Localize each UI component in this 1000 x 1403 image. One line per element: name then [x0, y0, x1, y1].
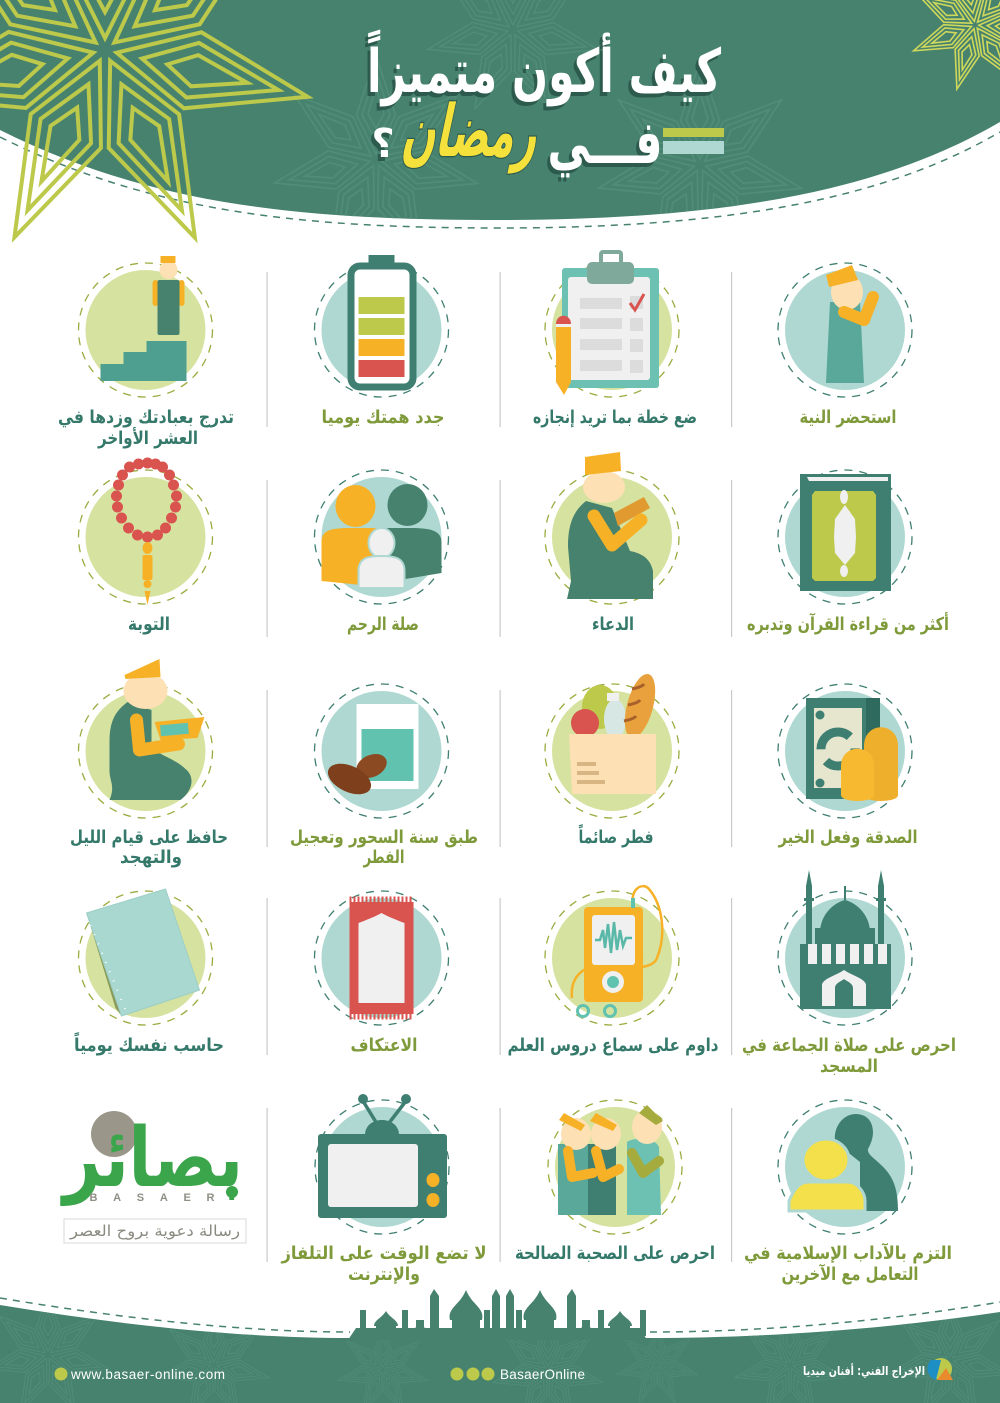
label: الاعتكاف [350, 1035, 418, 1056]
item: self accounting [74, 889, 224, 1056]
icon: reading man [78, 659, 212, 818]
item: family [314, 470, 448, 635]
label: طبق سنة السحور وتعجيل [290, 827, 478, 848]
item: retreat [314, 891, 448, 1056]
label: فطر صائماً [578, 824, 654, 848]
label: لا تضع الوقت على التلفاز [281, 1243, 486, 1264]
item: repentance [78, 458, 212, 635]
title [367, 29, 721, 178]
label: ضع خطة بما تريد إنجازه [533, 407, 697, 428]
label: تدرج بعبادتك وزدها في [58, 407, 234, 428]
item: intention [778, 263, 912, 428]
header panel [0, 0, 1000, 267]
icon: grocery bag [545, 671, 679, 818]
label: والإنترنت [348, 1264, 420, 1285]
icon: battery [314, 255, 448, 397]
item: battery [314, 255, 448, 428]
icon: audio player [545, 886, 679, 1025]
item: night prayer [70, 659, 228, 868]
logo word: بصائر [60, 1111, 243, 1206]
title: كيف أكون متميزاً [367, 29, 721, 107]
label: التعامل مع الآخرين [782, 1263, 918, 1285]
item: manners [744, 1100, 952, 1285]
label: داوم على سماع دروس العلم [508, 1035, 718, 1056]
item: mosque [742, 870, 956, 1077]
label [290, 827, 478, 868]
website: www.basaer-online.com [70, 1367, 225, 1382]
social handles [450, 1367, 585, 1382]
label: الدعاء [592, 614, 634, 635]
label: حافظ على قيام الليل [70, 827, 228, 848]
icon: family [314, 470, 448, 604]
label: صلة الرحم [347, 614, 419, 635]
title: فـــي [548, 108, 662, 178]
icon: money and coins [778, 684, 912, 818]
label: احرص على الصحبة الصالحة [515, 1243, 715, 1264]
mosque silhouette [348, 1289, 647, 1340]
social handles: BasaerOnline [500, 1367, 585, 1382]
label: جدد همتك يوميا [322, 407, 444, 428]
title word ramadan: رمضان [397, 90, 550, 174]
item: charity [778, 684, 918, 848]
label: العشر الأواخر [97, 427, 198, 449]
label: المسجد [820, 1056, 878, 1077]
label: التوبة [128, 614, 170, 635]
label: حاسب نفسك يومياً [74, 1032, 224, 1056]
lime star right [897, 0, 1000, 101]
logo tagline: رسالة دعوية بروح العصر [69, 1222, 240, 1240]
icon: water and dates [314, 684, 448, 818]
icon: clipboard [545, 252, 679, 397]
title: ؟ [371, 121, 395, 167]
icon: television [315, 1094, 449, 1234]
logo tagline [64, 1219, 246, 1243]
item: iftar [545, 671, 679, 848]
item: suhoor [290, 684, 478, 868]
icon: man on stairs [78, 256, 212, 397]
faint footer stars [0, 1312, 1000, 1403]
item: supplication [545, 452, 679, 635]
label [744, 1242, 952, 1285]
label [58, 407, 234, 449]
icon: notebook [78, 889, 212, 1025]
label: التزم بالآداب الإسلامية في [744, 1242, 952, 1264]
item: quran [747, 470, 949, 635]
label: الصدقة وفعل الخير [778, 827, 918, 848]
icon: quran book [778, 470, 912, 604]
dividers [266, 272, 732, 1262]
icon: three friends [548, 1100, 682, 1234]
icon: prayer rug [314, 891, 448, 1025]
item: television [281, 1094, 486, 1285]
label: احرص على صلاة الجماعة في [742, 1035, 956, 1056]
item: company [515, 1100, 715, 1264]
label: والتهجد [120, 847, 182, 868]
label [70, 827, 228, 868]
label: الفطر [363, 847, 404, 868]
label: أكثر من قراءة القرآن وتدبره [747, 612, 949, 635]
icon: prayer beads [78, 458, 212, 605]
icon: mosque [778, 870, 912, 1025]
credit: الإخراج الفني: أفنان ميديا [803, 1363, 925, 1378]
item: stairs [58, 256, 234, 449]
item: plan [533, 252, 697, 428]
icon: two people [778, 1100, 912, 1234]
logo [60, 1111, 246, 1243]
label [281, 1243, 486, 1285]
logo latin name: BASAER [90, 1192, 215, 1204]
item: lessons [508, 886, 718, 1056]
credit [803, 1358, 953, 1380]
icon: kneeling man [545, 452, 679, 604]
footer panel [0, 1289, 1000, 1403]
label [742, 1035, 956, 1077]
title bars [663, 128, 724, 154]
icon: praying man [778, 263, 912, 397]
label: استحضر النية [800, 407, 896, 428]
faint header stars [273, 0, 804, 219]
lime star left [0, 0, 316, 254]
